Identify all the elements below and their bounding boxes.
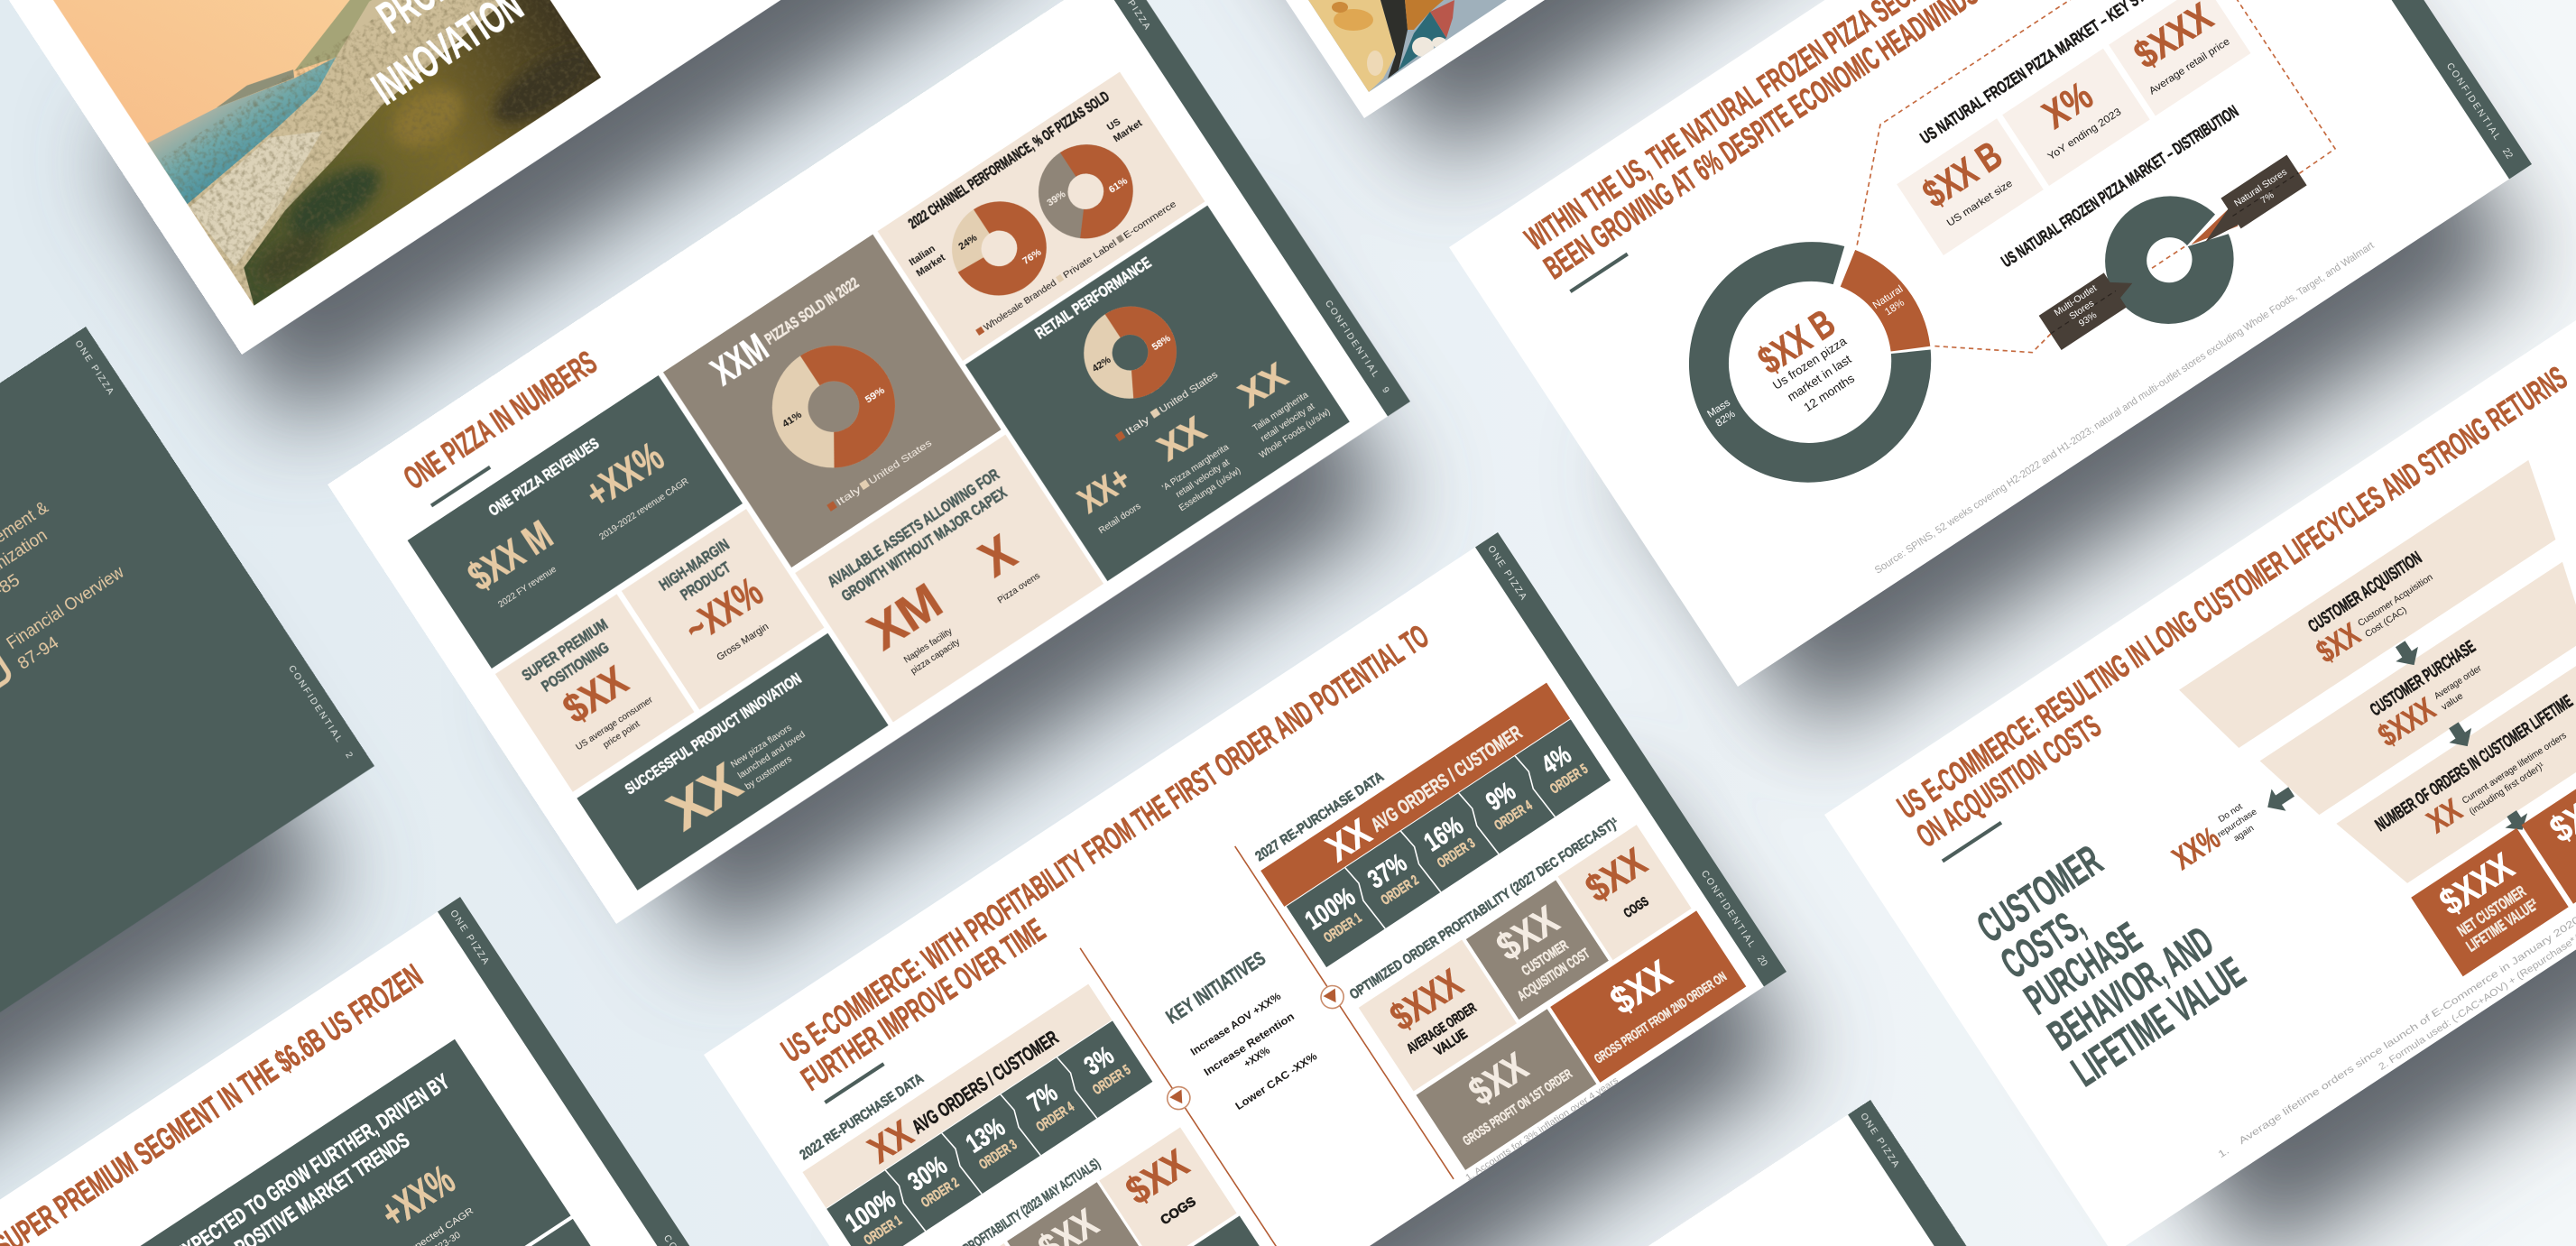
slide: pizza photo [1286, 0, 1545, 118]
panel: channel performance: 39% [1045, 189, 1067, 208]
panel: retail performance: RETAIL PERFORMANCE [1031, 254, 1154, 342]
left column: 2022 re-purchase data: 100% [841, 1185, 900, 1238]
side heading: BEHAVIOR, AND [2040, 918, 2222, 1060]
cell: gross profit first order: GROSS PROFIT ON 1ST ORDER [1461, 1066, 1575, 1149]
right column: 2027 re-purchase data: 16% [1419, 812, 1468, 857]
key initiatives: Lower CAC -XX% [1233, 1049, 1319, 1112]
panel: revenues: $XX M [459, 512, 560, 600]
panel: pizzas sold: 41% [780, 410, 804, 429]
side bar: ONE PIZZA [1485, 544, 1528, 602]
agenda item: financial overview: 87-94 [14, 633, 62, 674]
panel: pizzas sold: PIZZAS SOLD IN 2022 [762, 273, 862, 348]
stat: whole foods velocity: retail velocity at [1260, 401, 1316, 444]
stat: do not repurchase: repurchase [2216, 807, 2259, 840]
panel: super premium: US average consumer [574, 695, 655, 752]
legend [826, 438, 935, 513]
cell: customer acquisition cost: ACQUISITION COST [1515, 946, 1593, 1004]
stat: esselunga velocity: 'A Pizza margherita [1160, 442, 1231, 494]
panel: available assets: X [969, 523, 1026, 587]
left column: order profitability: COGS [1159, 1195, 1199, 1228]
legend: Italy [835, 484, 863, 509]
donut chart: frozen pizza market: market in last [1785, 352, 1854, 404]
side heading: COSTS, [1993, 900, 2092, 988]
right column: 2027 re-purchase data: ORDER 1 [1321, 910, 1364, 946]
donut chart: frozen pizza market: Us frozen pizza [1770, 334, 1849, 392]
side labels [72, 338, 355, 761]
side bar: ONE PIZZA [448, 909, 491, 966]
side heading: CUSTOMER [1970, 837, 2110, 952]
panel: high margin: Gross Margin [715, 622, 771, 663]
legend: United States [867, 438, 935, 487]
left column: 2022 re-purchase data: 13% [961, 1113, 1011, 1158]
panel: product innovation: by customers [743, 754, 794, 792]
panel: available assets: Pizza ovens [996, 571, 1042, 606]
cell: gross profit second order: $XX [1602, 952, 1679, 1023]
right column: 2027 re-purchase data: ORDER 5 [1547, 761, 1591, 798]
panel: pizzas sold [663, 235, 1002, 568]
legend: United States [1158, 369, 1221, 415]
stat: retail doors: XX+ [1071, 458, 1138, 521]
left column: 2022 re-purchase data: 30% [903, 1151, 952, 1197]
stat: esselunga velocity: retail velocity at [1174, 457, 1232, 500]
left column: 2022 re-purchase data: ORDER 4 [1034, 1099, 1077, 1135]
side bar [438, 897, 749, 1246]
photo of pizza on table [1308, 0, 1507, 92]
funnel step: customer purchase: CUSTOMER PURCHASE [2367, 637, 2479, 720]
funnel step: customer acquisition: Customer Acquisition [2357, 572, 2435, 629]
donut chart: retail split [1085, 309, 1175, 397]
panel: available assets: XM [858, 572, 952, 660]
side bar: CONFIDENTIAL [1323, 299, 1380, 379]
cell: customer acquisition cost: $XX [1489, 898, 1566, 969]
source note: Source: SPINS, 52 weeks covering H2-2022 and H1-2023; natural and multi-outlet stores excluding Whole Foods, Target, and Walmart [1873, 240, 2377, 577]
funnel step: customer acquisition [2179, 460, 2573, 758]
callout: natural stores: Natural Stores [2233, 167, 2289, 209]
side bar: CONFIDENTIAL [2444, 61, 2502, 142]
stat: retail doors [1071, 458, 1148, 536]
right column: 2027 re-purchase data: 4% [1537, 741, 1576, 780]
side labels: CONFIDENTIAL [286, 664, 344, 744]
panel: available assets [795, 435, 1103, 722]
stat: average retail price [2109, 0, 2250, 115]
arrow: acquisition to purchase [2389, 637, 2425, 672]
side bar [1099, 0, 1410, 416]
legend: Wholesale Branded [983, 278, 1058, 333]
side bar: 9 [1380, 385, 1391, 395]
funnel step: customer purchase [2260, 562, 2576, 826]
right column: order profitability forecast [1347, 806, 1746, 1171]
side labels: 2 [343, 751, 355, 761]
funnel step: number of orders: (including first order)¹ [2468, 761, 2546, 817]
panel: channel performance: Market [1112, 118, 1145, 144]
stat: whole foods velocity: Talia margherita [1251, 390, 1310, 434]
donut chart: frozen pizza market: Natural [1871, 284, 1905, 311]
photo of Naples coast [0, 0, 605, 306]
stat: whole foods velocity [1218, 346, 1333, 461]
agenda item: management [0, 498, 77, 613]
panel: channel performance: Italian [907, 243, 937, 268]
title: ONE PIZZA IN NUMBERS [397, 344, 603, 496]
funnel step: number of orders: Current average lifetime orders [2461, 731, 2569, 807]
cell: average order value: VALUE [1432, 1027, 1471, 1059]
box: net customer lifetime value [2411, 828, 2569, 976]
key initiatives: Increase AOV +XX% [1188, 990, 1283, 1058]
panel: product innovation [577, 633, 889, 891]
side bar: 20 [1755, 954, 1769, 968]
panel: channel performance [878, 72, 1205, 361]
panel: channel performance: 76% [1020, 247, 1044, 267]
key initiatives [1162, 946, 1328, 1117]
slide: super premium segment [0, 897, 749, 1246]
side bar [1848, 1100, 2159, 1246]
funnel step: customer purchase: Average order [2433, 663, 2484, 702]
stat: market size [1897, 118, 2044, 255]
funnel step: customer purchase: $XXX [2372, 690, 2442, 753]
right column: 2027 re-purchase data: XX [1318, 810, 1379, 870]
panel: product innovation: XX [658, 752, 752, 842]
panel: revenues: ONE PIZZA REVENUES [485, 434, 603, 520]
panel: revenues: 2019-2022 revenue CAGR [598, 476, 690, 542]
stat: do not repurchase: XX% [2166, 820, 2226, 876]
side labels: ONE PIZZA [72, 338, 115, 397]
legend [1114, 369, 1221, 444]
side bar [1475, 532, 1787, 986]
panel: high margin: PRODUCT [677, 558, 734, 604]
funnel step: customer acquisition: CUSTOMER ACQUISITION [2305, 548, 2425, 637]
funnel step: customer purchase: value [2440, 691, 2465, 713]
cell: gross profit first order [1416, 1009, 1596, 1170]
stat: yoy: X% [2036, 73, 2101, 137]
panel: revenues: +XX% [577, 432, 671, 517]
panel: channel performance: US [1105, 116, 1122, 134]
panel: retail performance [965, 206, 1350, 581]
left column: 2022 re-purchase data: ORDER 5 [1090, 1062, 1133, 1098]
stat: esselunga velocity: Esselunga (u/s/w) [1177, 466, 1242, 513]
dashed connector [1809, 0, 2337, 401]
stat: retail doors: Retail doors [1097, 502, 1143, 536]
key initiatives: KEY INITIATIVES [1162, 946, 1270, 1028]
panel: product innovation: New pizza flavors [729, 724, 794, 771]
cell: customer acquisition cost [1466, 881, 1609, 1020]
panel: channel performance: 61% [1107, 176, 1130, 196]
stat: whole foods velocity: Whole Foods (u/s/w) [1258, 407, 1333, 461]
footnote: 1. Accounts for 3% inflation over 4 years [1463, 1075, 1620, 1183]
panel: super premium: $XX [554, 656, 636, 732]
slide: agenda (dark) [0, 327, 374, 1246]
agenda item: financial overview: Financial Overview [3, 562, 128, 653]
callout: multi-outlet stores: 93% [2077, 310, 2099, 329]
left column: 2022 re-purchase data: 3% [1079, 1041, 1119, 1081]
right column: 2027 re-purchase data: 100% [1300, 882, 1361, 936]
stat: market size: $XX B [1916, 133, 2010, 217]
legend: E-commerce [1122, 199, 1178, 241]
left column: 2022 re-purchase data: ORDER 3 [976, 1137, 1020, 1173]
panel: channel performance: 2022 CHANNEL PERFORMANCE, % OF PIZZAS SOLD [905, 88, 1113, 232]
panel: available assets: pizza capacity [909, 637, 962, 677]
box: net customer lifetime value: NET CUSTOMER [2454, 882, 2529, 940]
cell: gross profit second order: GROSS PROFIT FROM 2ND ORDER ON [1593, 970, 1730, 1066]
slide: bottom right (partial) [1076, 1100, 2159, 1246]
callout: natural stores: 7% [2259, 190, 2276, 207]
slide: one pizza in numbers [328, 0, 1410, 924]
right column: 2027 re-purchase data: ORDER 3 [1435, 835, 1478, 872]
side heading: PURCHASE [2017, 914, 2150, 1024]
side bar [2221, 0, 2532, 179]
panel: super premium: SUPER PREMIUM [519, 615, 611, 685]
panel: pizzas sold: XXM [704, 326, 776, 394]
side bar: 22 [2500, 146, 2515, 161]
stat: do not repurchase [2166, 794, 2266, 878]
side bar: ONE PIZZA [1858, 1112, 1901, 1169]
left column: 2022 re-purchase data: ORDER 2 [919, 1175, 962, 1211]
panel: retail performance: 58% [1150, 333, 1173, 353]
stat: whole foods velocity: XX [1232, 355, 1295, 415]
left column: order profitability [883, 1108, 1288, 1246]
stat: average retail price: Average retail price [2147, 36, 2232, 97]
left column: order profitability: $XX [1118, 1141, 1196, 1214]
donut chart: frozen pizza market: 82% [1714, 409, 1738, 429]
panel: available assets: GROWTH WITHOUT MAJOR CAPEX [838, 484, 1010, 605]
box: net customer lifetime value: $XXX [2432, 845, 2521, 923]
callout: multi-outlet stores [2039, 263, 2142, 350]
right column: order profitability forecast: OPTIMIZED ORDER PROFITABILITY (2027 DEC FORECAST)¹ [1347, 815, 1621, 1002]
legend: Italy [1123, 414, 1152, 438]
funnel step: number of orders [2336, 657, 2576, 898]
title: ON ACQUISITION COSTS [1910, 707, 2107, 854]
stat: do not repurchase: Do not [2217, 802, 2245, 825]
panel: super premium: price point [602, 719, 642, 751]
funnel step: customer acquisition: $XX [2310, 616, 2367, 669]
legend: Private Label [1062, 239, 1119, 281]
cell: average order value: AVERAGE ORDER [1404, 1001, 1480, 1057]
donut chart: distribution [2110, 180, 2261, 320]
side heading [1970, 805, 2254, 1096]
left column: 2022 re-purchase data: AVG ORDERS / CUSTOMER [908, 1026, 1062, 1138]
panel: super premium: POSITIONING [538, 638, 612, 695]
legend [975, 199, 1178, 337]
panel: retail performance: 42% [1091, 355, 1113, 374]
donut chart: frozen pizza market: 18% [1883, 298, 1907, 318]
cell: cogs: $XX [1578, 840, 1655, 910]
divider with marker [1071, 942, 1313, 1246]
donut chart: frozen pizza market: Mass [1705, 397, 1732, 420]
slide: us e-commerce profitability [704, 532, 1787, 1246]
panel: product innovation: launched and loved [736, 730, 808, 781]
stat: yoy: YoY ending 2023 [2046, 106, 2123, 162]
left column: 2022 re-purchase data [791, 966, 1152, 1246]
panel: high margin [622, 509, 824, 710]
cell: average order value [1359, 940, 1517, 1091]
panel: pizzas sold: 59% [863, 385, 887, 405]
panel: high margin: ~XX% [676, 568, 771, 652]
donut chart: pizzas sold by country [773, 346, 894, 466]
panel: super premium [495, 594, 694, 792]
side bar: CONFIDENTIAL [1699, 869, 1757, 949]
right column: 2027 re-purchase data: AVG ORDERS / CUSTOMER [1367, 721, 1526, 836]
arrow: orders to value [2500, 807, 2534, 837]
key initiatives: Increase Retention [1202, 1010, 1297, 1078]
panel: market growth [0, 1039, 571, 1246]
title [1519, 0, 2022, 298]
arrow: to non-repurchasers [2260, 780, 2299, 818]
panel: revenues: 2022 FY revenue [497, 565, 559, 610]
donut chart: frozen pizza market: $XX B [1750, 301, 1843, 383]
slide: us e-commerce lifetime value [1824, 292, 2576, 1246]
photo title [332, 0, 539, 115]
right column: 2027 re-purchase data: 9% [1482, 777, 1521, 817]
cell: customer acquisition cost: CUSTOMER [1519, 937, 1571, 979]
box: second value [2522, 755, 2576, 904]
panel: channel performance: 24% [956, 232, 979, 253]
panel: market growth: +XX% [373, 1156, 463, 1237]
title [775, 617, 1461, 1108]
right column: 2027 re-purchase data: 37% [1363, 849, 1412, 894]
arrow: to repurchasers [2575, 574, 2576, 612]
stat: esselunga velocity: XX [1150, 409, 1214, 468]
stat: esselunga velocity [1135, 403, 1245, 515]
callout: multi-outlet stores: Multi-Outlet [2053, 283, 2099, 318]
cell: average order value: $XXX [1382, 961, 1470, 1039]
donut chart: frozen pizza market: 12 months [1801, 372, 1857, 414]
heading: distribution: US NATURAL FROZEN PIZZA MARKET – DISTRIBUTION [1998, 101, 2241, 271]
donut chart: frozen pizza market [1615, 168, 2005, 557]
stat: do not repurchase: again [2232, 824, 2256, 844]
panel: high margin: HIGH-MARGIN [656, 535, 733, 595]
right column: 2027 re-purchase data: 2027 RE-PURCHASE DATA [1253, 770, 1387, 864]
donut chart: italian market [954, 204, 1044, 293]
panel: available assets: Naples facility [902, 626, 955, 665]
right column: 2027 re-purchase data: ORDER 4 [1491, 798, 1536, 834]
slide: product innovation photo [9, 0, 781, 355]
right column: 2027 re-purchase data: ORDER 2 [1379, 872, 1422, 909]
cell: gross profit second order [1550, 910, 1746, 1083]
donut chart: us market [1040, 146, 1131, 236]
left column: 2022 re-purchase data: 2022 RE-PURCHASE DATA [798, 1071, 927, 1163]
cell: cogs: COGS [1621, 894, 1652, 921]
left column: 2022 re-purchase data: XX [861, 1112, 920, 1171]
arrow: purchase to orders [2442, 718, 2479, 753]
slide: natural frozen pizza segment [1449, 0, 2532, 687]
left column: 2022 re-purchase data: 7% [1023, 1078, 1063, 1118]
divider with marker [1224, 841, 1462, 1186]
panel: available assets: AVAILABLE ASSETS ALLOWING FOR [825, 465, 1002, 591]
icon: financial overview [0, 643, 12, 698]
panel: lower block [0, 1219, 670, 1246]
stat: market size: US market size [1945, 178, 2015, 229]
cell: gross profit first order: $XX [1462, 1045, 1536, 1114]
panel: product innovation: SUCCESSFUL PRODUCT INNOVATION [622, 669, 805, 798]
title [1891, 359, 2576, 866]
panel: revenues [408, 375, 743, 669]
title: US E-COMMERCE: WITH PROFITABILITY FROM THE FIRST ORDER AND POTENTIAL TO [775, 617, 1436, 1069]
stat: yoy [2002, 49, 2150, 186]
title: FURTHER IMPROVE OVER TIME [795, 911, 1051, 1097]
panel: channel performance: Market [914, 252, 947, 279]
key initiatives: +XX% [1242, 1044, 1272, 1070]
right column: 2027 re-purchase data [1250, 666, 1611, 968]
cell: cogs [1558, 825, 1692, 960]
side heading: LIFETIME VALUE [2064, 949, 2254, 1096]
callout: multi-outlet stores: Stores [2068, 299, 2096, 322]
funnel step: number of orders: XX [2421, 791, 2469, 840]
funnel step: customer acquisition: Cost (CAC) [2364, 605, 2409, 640]
callout: natural stores [2190, 155, 2307, 249]
